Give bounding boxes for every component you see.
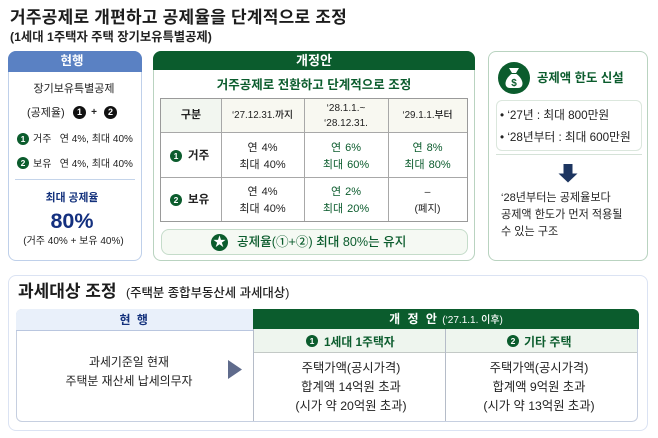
tax table [16,309,638,422]
row label: holding: 보유 [188,194,209,206]
deduction rate formula: 2 [108,107,113,117]
thresholds: single home owner: (시가 약 20억원 초과) [295,399,407,413]
cap heading: 공제액 한도 신설 [537,71,624,85]
cell: holding from 2029 [414,187,441,215]
current description: 주택분 재산세 납세의무자 [66,374,192,388]
panel: revised proposal [153,51,475,261]
header cell: 2028: ‘28.1.1.~ [327,103,365,114]
thresholds: other housing [483,361,595,413]
cell: residence until 2027 [239,142,286,171]
row label: holding: 2 [174,195,178,205]
arrow: right [228,360,242,379]
callout text: 공제율(①+②) 최대 80%는 유지 [237,235,406,249]
cell: holding 2028: 최대 20% [323,203,369,215]
thresholds: other housing: 주택가액(공시가격) [490,361,588,375]
explanatory note: 공제액 한도가 먼저 적용될 [501,209,623,221]
row: residence rate: 거주 연 4%, 최대 40% [33,134,133,145]
explanatory note: ‘28년부터는 공제율보다 [501,192,611,204]
cell: residence from 2029: 최대 80% [404,159,451,171]
current description [66,355,192,388]
row: holding rate: 보유 연 4%, 최대 40% [33,159,133,170]
thresholds: single home owner [295,361,407,413]
amount 2028: • ‘28년부터 : 최대 600만원 [500,131,631,144]
cell: residence until 2027: 최대 40% [239,159,286,171]
column header: current [16,309,254,331]
label: maximum rate: 최대 공제율 [46,192,98,204]
panel: taxable target adjustment [8,275,648,431]
header cell: from 2029 [388,99,467,132]
panel header: current: 현행 [60,54,84,68]
cell: holding from 2029: (폐지) [414,204,441,215]
header cell: from 2029: ‘29.1.1.부터 [402,110,453,121]
header cell: until 2027: ‘27.12.31.까지 [232,110,293,121]
row: residence rate: 1 [21,134,25,144]
header cell: 2028 [304,99,388,132]
cell: residence until 2027: 연 4% [247,142,278,154]
badge 2: 2 [511,336,515,346]
thresholds: single home owner: 합계액 14억원 초과 [301,380,401,394]
column header: proposal: 개 정 안 (‘27.1.1. 이후) [389,312,503,326]
badge 1: 1 [310,336,314,346]
label: other housing: 기타 주택 [524,335,572,349]
thresholds: other housing: 합계액 9억원 초과 [493,380,585,394]
subheader: other housing [445,329,637,353]
label: single home owner: 1세대 1주택자 [324,335,395,349]
deduction rate formula: + [91,107,97,118]
deduction rate formula [27,106,117,119]
row label: residence: 1 [174,151,178,161]
callout: 80 percent retained [161,229,468,255]
comparison table [160,98,468,222]
header cell: 2028: ‘28.12.31. [324,118,368,129]
cell: holding 2028 [323,186,369,215]
panel: current system [8,51,142,261]
header cell: category: 구분 [181,109,201,121]
panel header: proposal [153,51,475,70]
icon: star badge: ★ [213,234,226,249]
thresholds: single home owner: 주택가액(공시가격) [302,361,400,375]
amount 2027: • ‘27년 : 최대 800만원 [500,109,609,122]
row: holding rate: 2 [21,158,25,168]
subheader: single home owner [253,329,445,353]
icon: money bag [498,62,530,94]
cell: residence 2028 [323,142,369,171]
column header: current: 현 행 [120,313,149,327]
cell: residence from 2029: 연 8% [412,142,443,154]
section subheading: (주택분 종합부동산세 과세대상) [126,286,289,300]
subtitle: (1세대 1주택자 주택 장기보유특별공제) [10,30,212,44]
row label: residence [170,149,209,162]
row label: holding [170,194,209,206]
cap amounts box [496,100,642,151]
badge 2 [507,335,519,347]
icon: star badge [211,234,228,251]
header cell: until 2027 [221,99,304,132]
title: 거주공제로 개편하고 공제율을 단계적으로 조정 [10,8,347,27]
panel header: proposal: 개정안 [296,53,332,68]
panel: deduction cap [488,51,648,261]
figure: 80 percent: 80% [50,209,94,233]
badge 1 [306,335,318,347]
icon: money bag: $ [511,78,517,88]
thresholds: other housing: (시가 약 13억원 초과) [483,399,595,413]
current description: 과세기준일 현재 [89,355,169,369]
label: long-term holding deduction: 장기보유특별공제 [34,83,114,95]
header cell: category [161,99,221,132]
note: sum of rates: (거주 40% + 보유 40%) [23,236,124,247]
cell: holding until 2027: 연 4% [247,186,278,198]
cell: residence from 2029 [404,142,451,171]
arrow: down [558,164,578,182]
cell: holding until 2027: 최대 40% [239,203,286,215]
cell: holding until 2027 [239,186,286,215]
row label: residence: 거주 [188,150,209,162]
cell: holding 2028: 연 2% [331,186,361,198]
column header: proposal [253,309,639,329]
section heading: 과세대상 조정 [18,282,117,301]
cell: holding from 2029: – [425,187,430,198]
proposal summary: 거주공제로 전환하고 단계적으로 조정 [217,78,411,92]
deduction rate formula: (공제율) [27,107,65,119]
cell: residence 2028: 최대 60% [323,159,369,171]
panel header: current [8,51,142,72]
deduction rate formula: 1 [77,107,82,117]
cell: residence 2028: 연 6% [331,142,361,154]
explanatory note [501,191,623,238]
explanatory note: 수 있는 구조 [501,226,558,238]
